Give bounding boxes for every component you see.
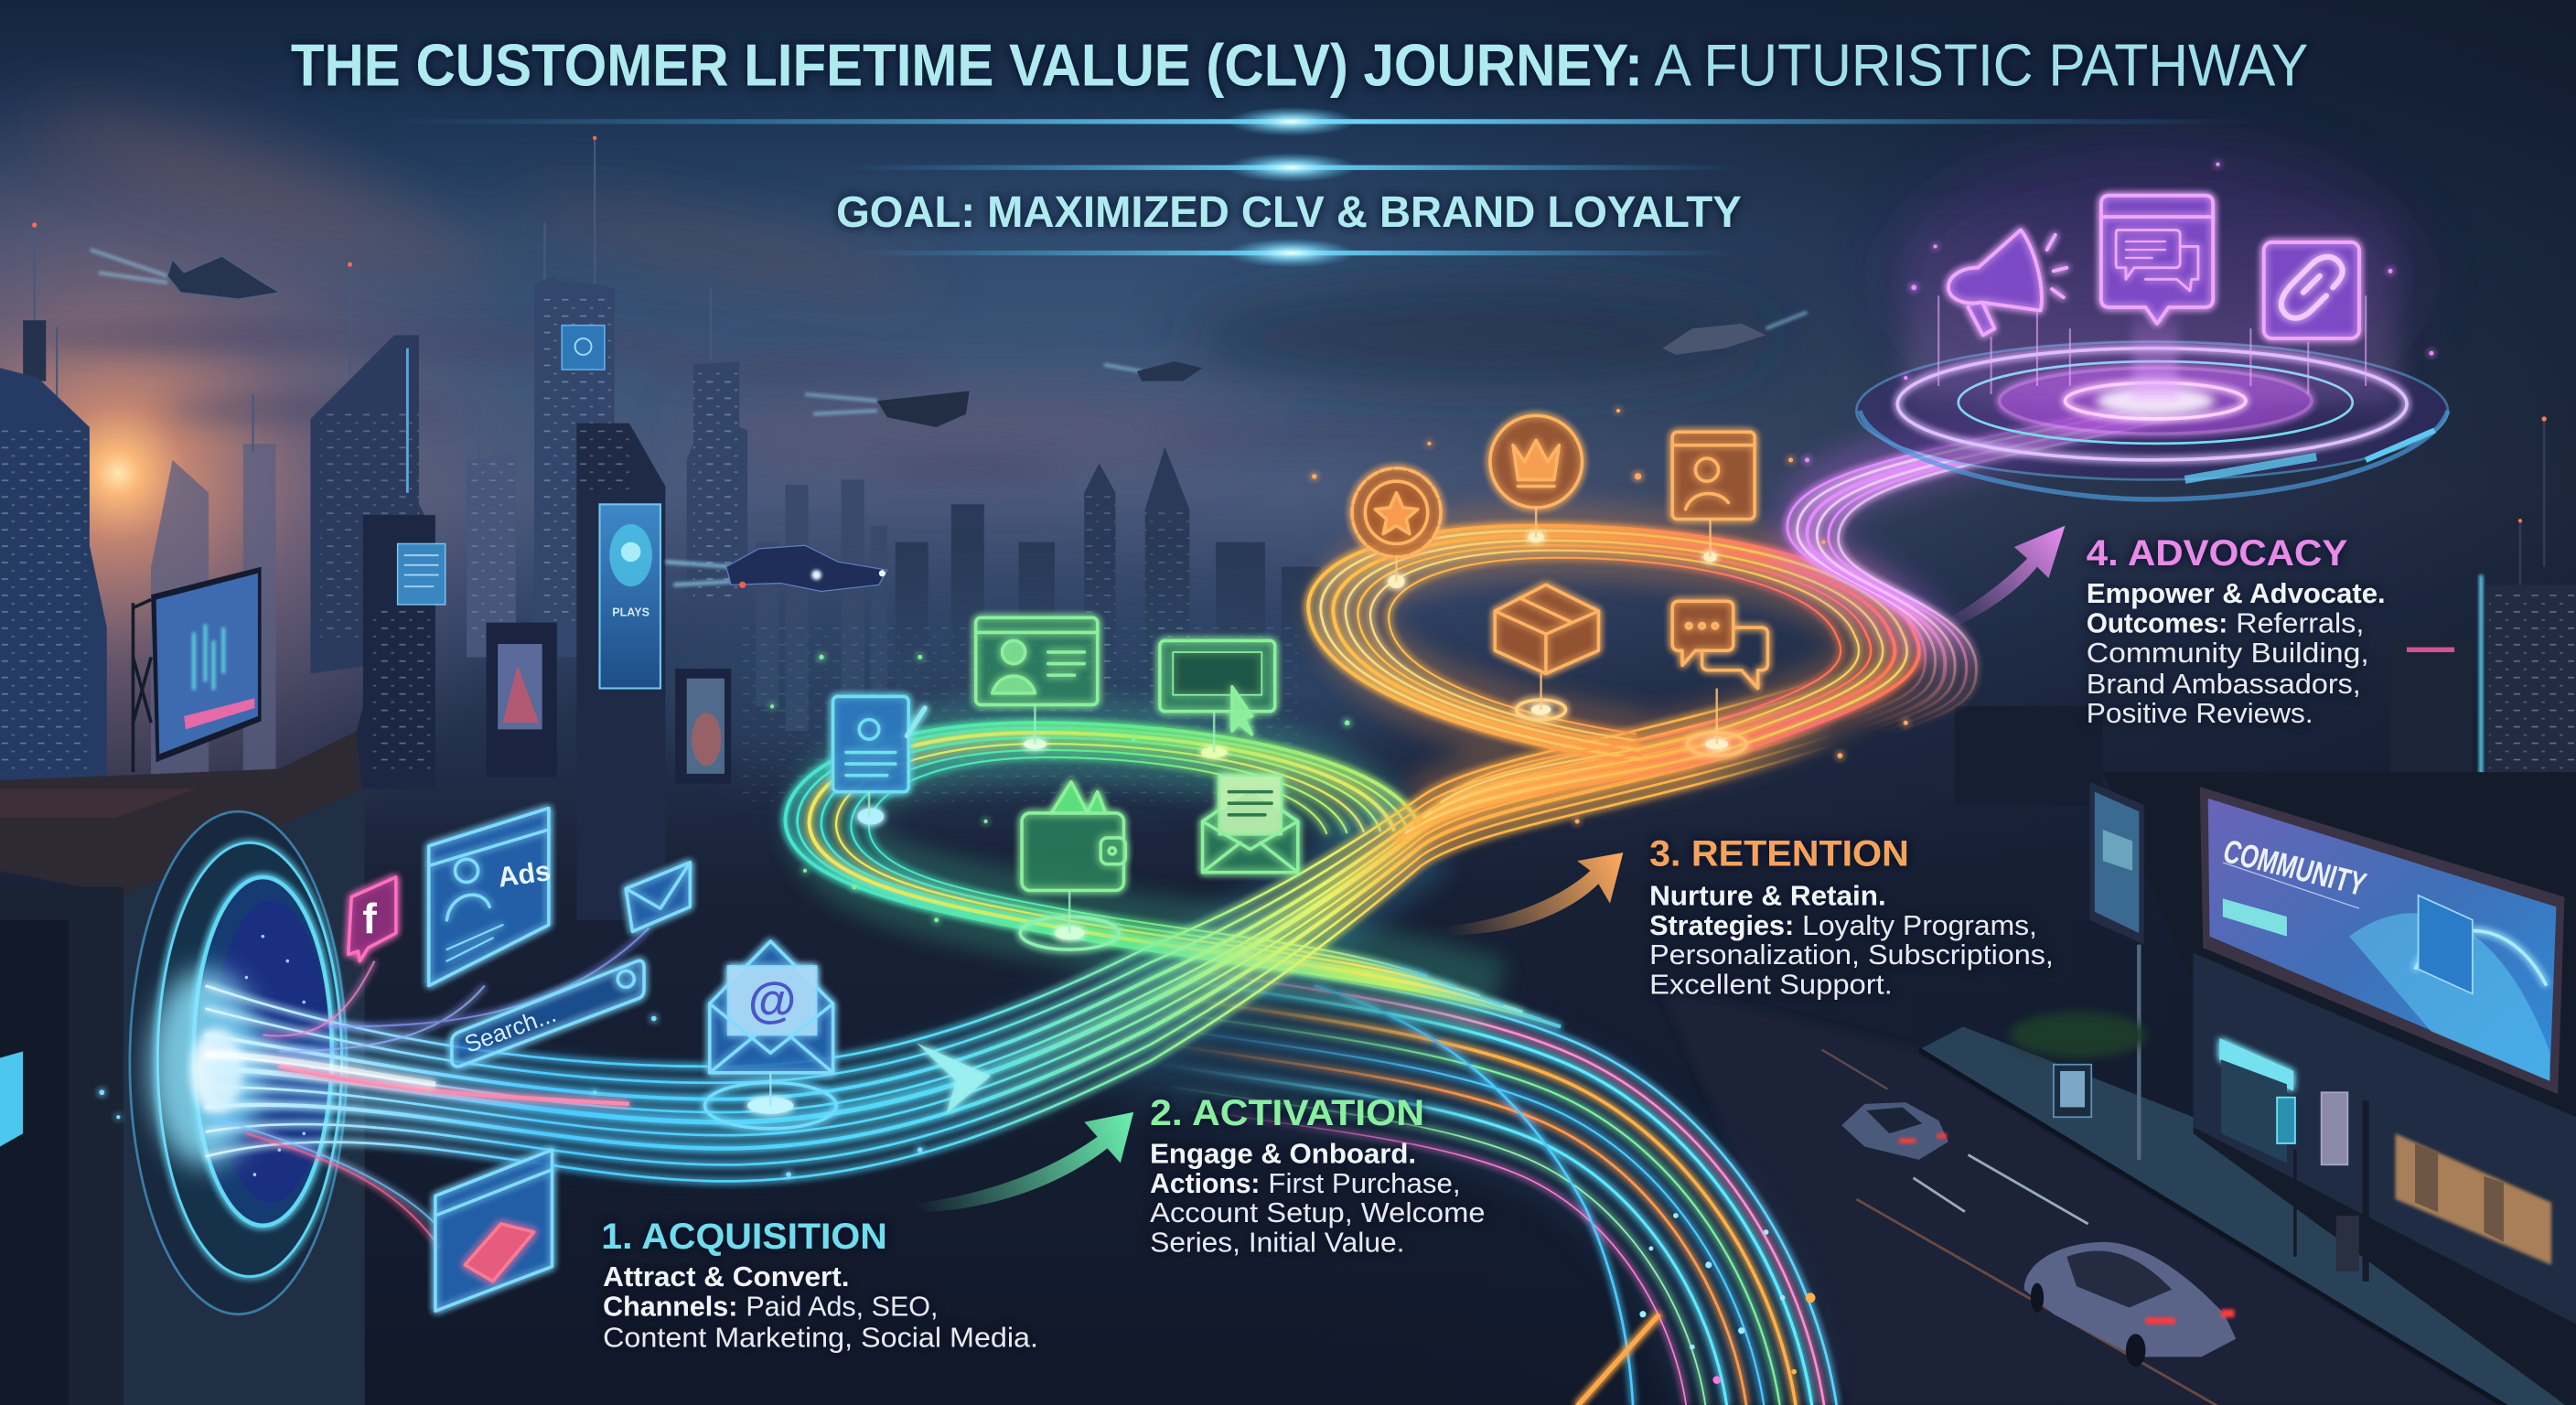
step 2: activation text xyxy=(1150,1093,1486,1258)
pedestal nodes and beams xyxy=(704,508,1746,1129)
icon: megaphone xyxy=(1948,230,2066,335)
step 2: activation text: First Purchase, xyxy=(1268,1168,1461,1199)
icon: link square xyxy=(2264,242,2359,338)
street scene xyxy=(1659,772,2576,1405)
icon: form document xyxy=(833,696,925,792)
arrow: to retention xyxy=(1444,853,1623,935)
step 4: advocacy text: 4. ADVOCACY xyxy=(2087,533,2347,574)
step 2: activation text: 2. ACTIVATION xyxy=(1150,1093,1424,1133)
foreground block with portal xyxy=(0,731,365,1405)
monitor on scaffold xyxy=(133,567,262,772)
step 1: acquisition text: Channels: xyxy=(603,1292,737,1323)
step 2: activation text: Engage & Onboard. xyxy=(1150,1139,1416,1170)
step 2: activation text: Actions: xyxy=(1150,1168,1260,1199)
icon: at envelope xyxy=(710,941,833,1073)
step 1: acquisition text: 1. ACQUISITION xyxy=(601,1217,887,1257)
retention icons xyxy=(1352,415,1767,688)
acquisition icons xyxy=(349,809,991,1311)
icon: product card with cursor xyxy=(1160,640,1275,735)
step 3: retention text: Strategies: xyxy=(1649,910,1794,941)
icon: flow arrowhead xyxy=(917,1043,991,1114)
goal and title divider glows xyxy=(378,107,2267,268)
flow ribbon: green activation loop xyxy=(785,723,1561,1026)
icon: profile card xyxy=(976,617,1098,704)
step 2: activation text: Account Setup, Welcome xyxy=(1150,1197,1486,1228)
scattered particles xyxy=(99,162,2433,1177)
icon: small envelope xyxy=(626,863,690,931)
title: THE CUSTOMER LIFETIME VALUE (CLV) JOURNEY: xyxy=(291,31,1643,98)
step 3: retention text: Excellent Support. xyxy=(1649,970,1893,1001)
icon: social page xyxy=(349,877,396,961)
step 4: advocacy text: Community Building, xyxy=(2087,638,2369,669)
icon: search bar xyxy=(452,960,644,1067)
step 3: retention text: Nurture & Retain. xyxy=(1649,881,1886,912)
arrow: to advocacy xyxy=(1944,526,2065,629)
icon labels in acquisition icons xyxy=(362,855,796,1058)
small billboard xyxy=(2089,782,2144,1160)
step 4: advocacy text: Brand Ambassadors, xyxy=(2087,669,2361,700)
arrow: to activation xyxy=(908,1112,1133,1212)
step 4: advocacy text: Referrals, xyxy=(2236,607,2364,638)
icon: star badge xyxy=(1352,468,1441,557)
flow ribbon: purple advocacy stream xyxy=(1787,407,2170,735)
billboard label: COMMUNITY xyxy=(2219,832,2370,903)
goal heading: GOAL: MAXIMIZED CLV & BRAND LOYALTY xyxy=(836,188,1742,237)
icon: wallet xyxy=(1022,782,1125,890)
icon labels in acquisition icons: f xyxy=(362,895,377,942)
tower screen label: PLAYS xyxy=(612,606,649,618)
step 3: retention text xyxy=(1649,833,2054,1001)
step 2: activation text: Series, Initial Value. xyxy=(1150,1227,1405,1258)
step 1: acquisition text: Content Marketing, Social Media. xyxy=(603,1323,1038,1354)
icon: ads window xyxy=(429,809,549,986)
icon: checkout window xyxy=(435,1150,552,1311)
flying vehicles xyxy=(91,250,1808,592)
step 4: advocacy text: Positive Reviews. xyxy=(2087,698,2313,729)
step 1: acquisition text: Attract & Convert. xyxy=(603,1261,849,1292)
flow ribbon: blue acquisition stream xyxy=(205,673,1840,1249)
storefront building xyxy=(2103,772,2576,1405)
right skyline xyxy=(1955,416,2576,805)
step 4: advocacy text: Empower & Advocate. xyxy=(2087,578,2386,609)
step 3: retention text: Personalization, Subscriptions, xyxy=(1649,939,2054,971)
step 4: advocacy text xyxy=(2087,533,2386,729)
step 3: retention text: 3. RETENTION xyxy=(1649,833,1909,874)
icon: open envelope xyxy=(1203,776,1298,873)
icon labels in acquisition icons: Search... xyxy=(461,1000,560,1058)
icon: chat window xyxy=(2101,196,2213,324)
bushes and kiosk xyxy=(2009,1012,2147,1117)
distant skyline xyxy=(151,444,1412,805)
activation icons xyxy=(833,617,1298,890)
icon labels in acquisition icons: Ads xyxy=(496,855,553,894)
flow ribbon: orange retention loop xyxy=(1308,526,1919,842)
advocacy hub platform xyxy=(1856,189,2448,499)
step 1: acquisition text xyxy=(601,1217,1038,1354)
flow ribbon: multicolour curve to bottom xyxy=(1114,965,1844,1405)
main community billboard xyxy=(2200,787,2564,1094)
portal xyxy=(130,811,347,1314)
step 1: acquisition text: Paid Ads, SEO, xyxy=(746,1292,938,1323)
icon: profile window xyxy=(1672,432,1755,520)
left skyline towers xyxy=(0,136,747,920)
advocacy icons xyxy=(1948,196,2359,338)
icon: crown xyxy=(1490,415,1582,508)
icon: box xyxy=(1495,585,1598,673)
title: A FUTURISTIC PATHWAY xyxy=(1654,31,2308,98)
step 4: advocacy text: Outcomes: xyxy=(2087,607,2227,638)
icon labels in acquisition icons: @ xyxy=(748,973,796,1028)
step 3: retention text: Loyalty Programs, xyxy=(1802,910,2037,941)
car large xyxy=(2024,1242,2236,1367)
car small xyxy=(1841,1102,1948,1160)
icon: chat bubbles xyxy=(1672,601,1767,688)
